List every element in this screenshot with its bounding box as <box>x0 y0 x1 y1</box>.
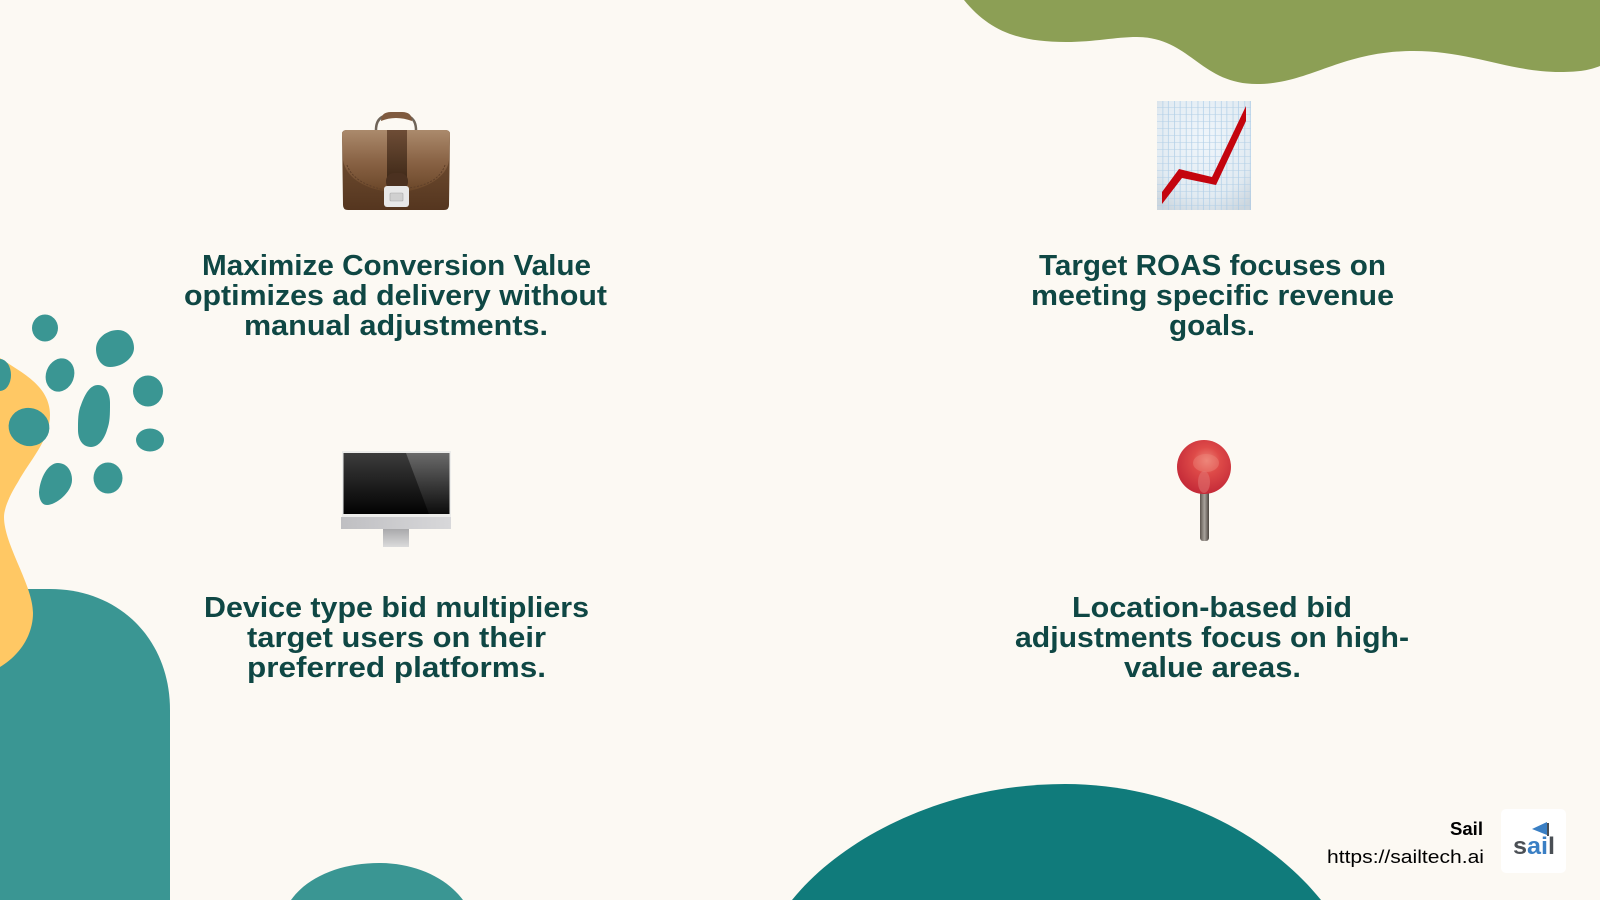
logo: sail <box>1501 809 1566 873</box>
text: device type bid multipliers: preferred platforms. <box>247 652 546 684</box>
text: maximize conversion value: manual adjustments. <box>244 310 548 342</box>
shape: large dark teal dome <box>792 784 1321 900</box>
shape: teal left column <box>0 589 170 900</box>
text: target roas: meeting specific revenue <box>1031 280 1394 312</box>
text: device type bid multipliers: Device type bid multipliers <box>204 592 589 624</box>
text: maximize conversion value <box>184 250 607 342</box>
text: location-based bid adjustments: value areas. <box>1124 652 1301 684</box>
footer: brand name and url <box>1327 819 1484 867</box>
text: target roas: goals. <box>1169 310 1255 342</box>
dots: teal cluster <box>0 314 164 505</box>
shape: small teal dome <box>291 863 463 900</box>
text: location-based bid adjustments: Location-based bid <box>1072 592 1352 624</box>
text: maximize conversion value: optimizes ad delivery without <box>184 280 607 312</box>
text: location-based bid adjustments: adjustments focus on high- <box>1015 622 1409 654</box>
text: maximize conversion value: Maximize Conversion Value <box>202 250 591 282</box>
logo: sail: sail <box>1513 833 1555 860</box>
footer: brand name and url: Sail <box>1450 819 1483 839</box>
blob: yellow left <box>0 358 50 667</box>
text: target roas <box>1031 250 1394 342</box>
icon: desktop monitor <box>341 451 451 547</box>
icon: round pushpin <box>1177 440 1231 541</box>
text: target roas: Target ROAS focuses on <box>1039 250 1386 282</box>
blob: olive top right <box>964 0 1600 84</box>
text: device type bid multipliers <box>204 592 589 684</box>
footer: brand name and url: https://sailtech.ai <box>1327 846 1484 867</box>
icon: briefcase <box>342 112 450 210</box>
text: device type bid multipliers: target users on their <box>247 622 546 654</box>
text: location-based bid adjustments <box>1015 592 1409 684</box>
icon: line chart <box>1157 101 1251 210</box>
